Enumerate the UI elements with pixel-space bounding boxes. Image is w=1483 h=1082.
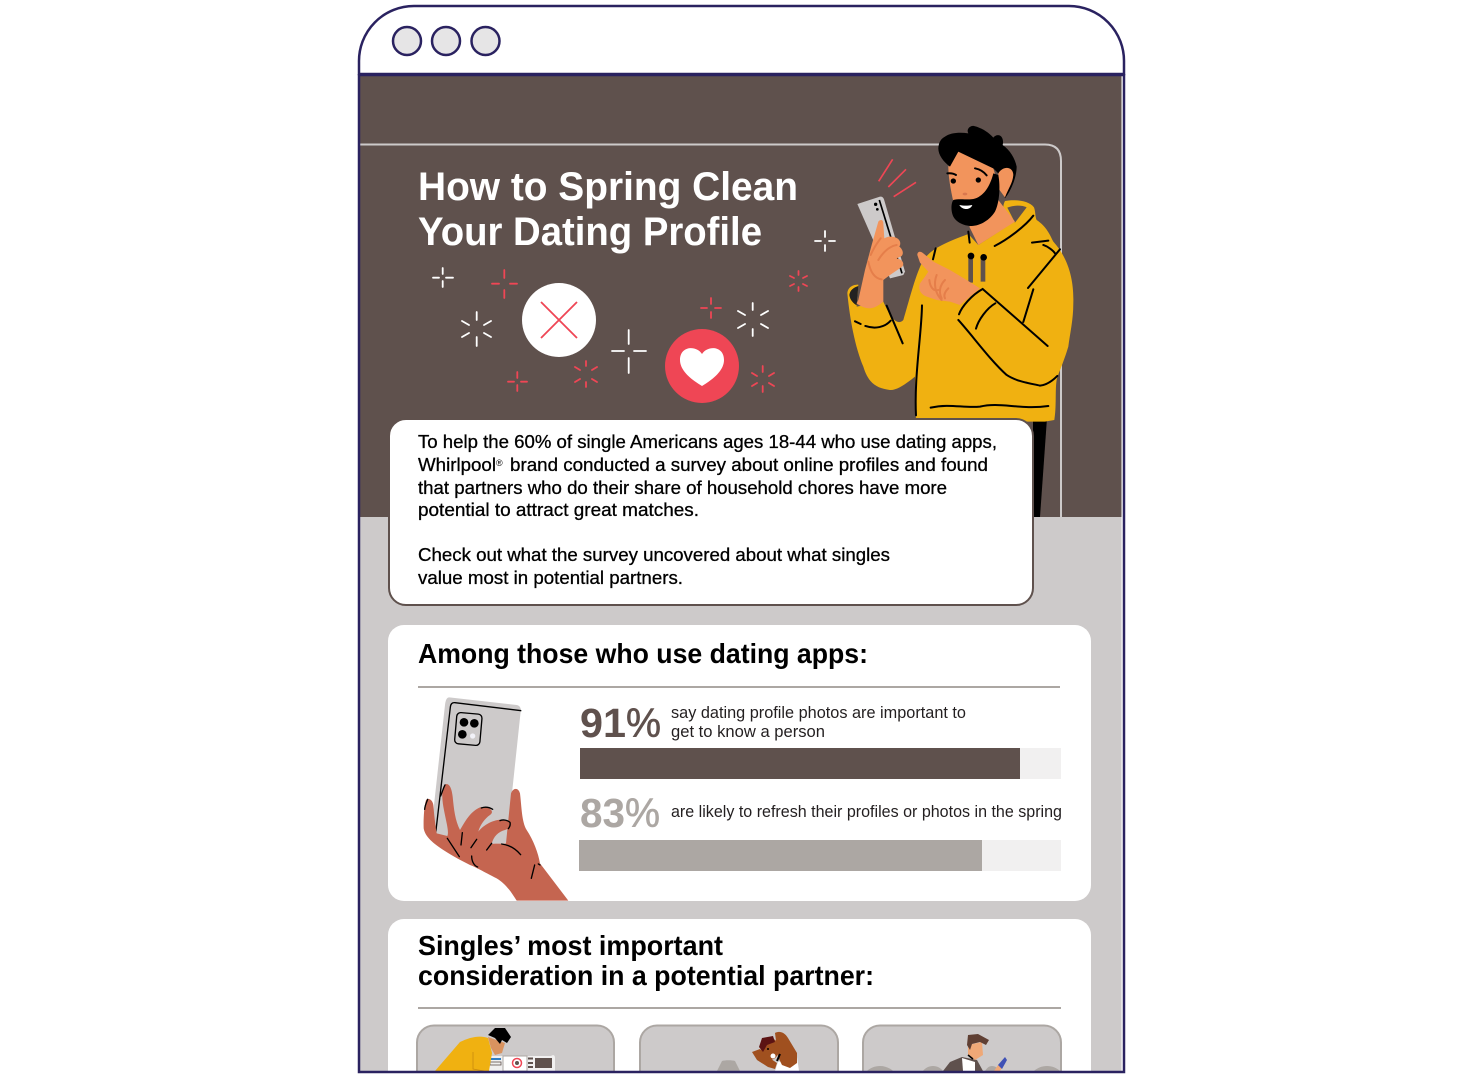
stat: 91 percent: % — [626, 700, 661, 746]
hair — [938, 126, 1017, 198]
panel heading: Among those who use dating apps: — [418, 638, 868, 669]
browser window header — [359, 6, 1124, 74]
neck — [969, 200, 1015, 245]
panel: dating app statistics — [388, 625, 1091, 901]
washer — [488, 1055, 555, 1071]
illustration: man in yellow hoodie with phone — [847, 126, 1073, 422]
hero background — [360, 76, 1122, 517]
chair mounds — [867, 1066, 1060, 1071]
smile — [959, 205, 972, 209]
hoodie — [847, 200, 1073, 422]
title — [418, 165, 798, 254]
illustration: hand holding phone — [424, 697, 568, 901]
panel heading — [418, 930, 874, 991]
icon: reject X — [522, 283, 596, 357]
holding hand — [857, 220, 903, 308]
hood interior — [1007, 206, 1027, 223]
card: man at washing machine — [416, 1024, 615, 1071]
intro card — [389, 419, 1033, 605]
title: How to Spring Clean — [418, 165, 798, 209]
stat: 83 percent — [580, 790, 1062, 836]
panel: partner considerations — [388, 919, 1091, 1082]
intro text: brand conducted a survey about online profiles and found — [510, 454, 988, 475]
laundry mound — [717, 1060, 740, 1071]
bar: 83 percent — [579, 840, 1061, 871]
bar: 91 percent — [580, 748, 1061, 779]
ear — [998, 168, 1013, 197]
hoodie outlines — [855, 216, 1060, 415]
card: woman with hands behind head — [639, 1024, 839, 1071]
panel heading: consideration in a potential partner: — [418, 960, 874, 991]
woman — [752, 1032, 799, 1071]
stat: 91 percent: 91 — [580, 700, 626, 746]
stat: 91 percent — [580, 700, 966, 746]
man — [943, 1034, 1007, 1071]
intro text: that partners who do their share of household chores have more — [418, 477, 947, 498]
legs of man — [1033, 418, 1047, 517]
stat: 91 percent: get to know a person — [671, 722, 825, 741]
man leaning over washer — [435, 1028, 511, 1071]
stat: 91 percent: say dating profile photos are important to — [671, 703, 966, 722]
nose — [963, 193, 967, 195]
intro text — [418, 431, 997, 588]
red notification lines — [879, 159, 916, 197]
panel heading: Singles’ most important — [418, 930, 723, 961]
cuff — [849, 286, 858, 305]
background: grey page area — [360, 76, 1122, 1072]
card: man with phone — [862, 1024, 1062, 1071]
intro text: Whirlpool — [418, 454, 496, 475]
intro text: value most in potential partners. — [418, 567, 683, 588]
icon: heart like — [665, 329, 739, 403]
drawstrings — [971, 257, 983, 283]
intro text: To help the 60% of single Americans ages 18-44 who use dating apps, — [418, 431, 997, 452]
intro text: Check out what the survey uncovered about what singles — [418, 544, 890, 565]
intro text: potential to attract great matches. — [418, 499, 699, 520]
stat: 83 percent: are likely to refresh their profiles or photos in the spring — [671, 802, 1062, 821]
stat: 83 percent: 83 — [580, 790, 625, 836]
pointing hand — [917, 252, 980, 305]
title: Your Dating Profile — [418, 210, 762, 254]
sparkles — [433, 231, 835, 392]
eyes — [951, 178, 956, 184]
infographic page — [358, 4, 1126, 1074]
phone — [857, 197, 905, 278]
head — [948, 152, 998, 208]
beard — [951, 173, 999, 226]
browser window outline — [359, 74, 1124, 1072]
intro text: ® — [496, 458, 503, 468]
hero frame line — [360, 144, 1061, 517]
stat: 83 percent: % — [625, 790, 660, 836]
